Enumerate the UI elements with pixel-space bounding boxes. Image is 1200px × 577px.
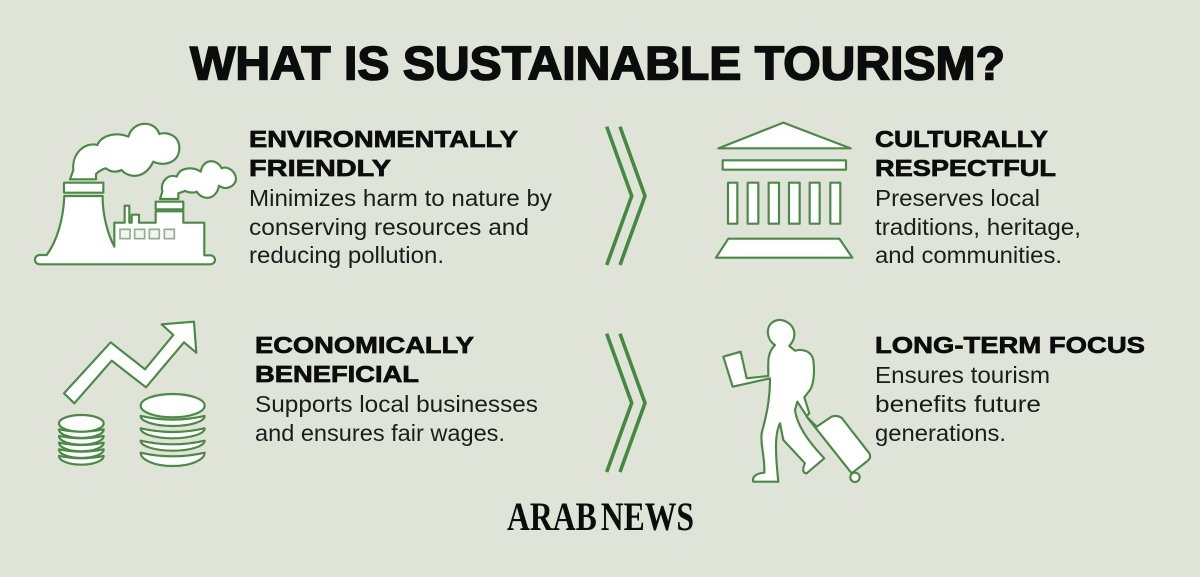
heading: economically beneficial: BENEFICIAL (255, 361, 419, 387)
heading: environmentally friendly: ENVIRONMENTALLY (249, 126, 518, 152)
icon: temple (716, 123, 852, 258)
arrow: top chevrons (607, 127, 645, 265)
text: culturally respectful description: traditions, heritage, (875, 214, 1081, 240)
heading: economically beneficial (255, 332, 474, 387)
icon: factory (35, 124, 236, 264)
heading: environmentally friendly (249, 126, 518, 181)
text: culturally respectful description: and communities. (875, 242, 1062, 268)
icon: traveller with suitcase (723, 320, 870, 482)
heading: culturally respectful: RESPECTFUL (875, 155, 1056, 181)
logo: Arab News: ARAB NEWS (507, 494, 694, 539)
text: culturally respectful description: Preserves local (875, 185, 1040, 211)
text: long-term focus description (875, 362, 1050, 446)
text: long-term focus description: benefits future (875, 391, 1041, 417)
text: economically beneficial description: and ensures fair wages. (255, 420, 505, 446)
text: environmentally friendly description: reducing pollution. (249, 242, 444, 268)
text: environmentally friendly description: conserving resources and (249, 214, 529, 240)
heading: environmentally friendly: FRIENDLY (249, 155, 391, 181)
title: WHAT IS SUSTAINABLE TOURISM? (190, 36, 1005, 90)
heading: culturally respectful: CULTURALLY (875, 126, 1048, 152)
text: environmentally friendly description: Minimizes harm to nature by (249, 185, 553, 211)
text: culturally respectful description (875, 185, 1081, 268)
heading: long-term focus: LONG-TERM FOCUS (875, 332, 1145, 358)
text: economically beneficial description (255, 391, 538, 446)
heading: culturally respectful (875, 126, 1056, 181)
text: long-term focus description: generations. (875, 420, 1006, 446)
heading: economically beneficial: ECONOMICALLY (255, 332, 474, 358)
arrow: bottom chevrons (607, 334, 645, 472)
text: environmentally friendly description (249, 185, 553, 268)
text: economically beneficial description: Supports local businesses (255, 391, 538, 417)
icon: rising arrow and coins (59, 322, 205, 466)
text: long-term focus description: Ensures tourism (875, 362, 1050, 388)
